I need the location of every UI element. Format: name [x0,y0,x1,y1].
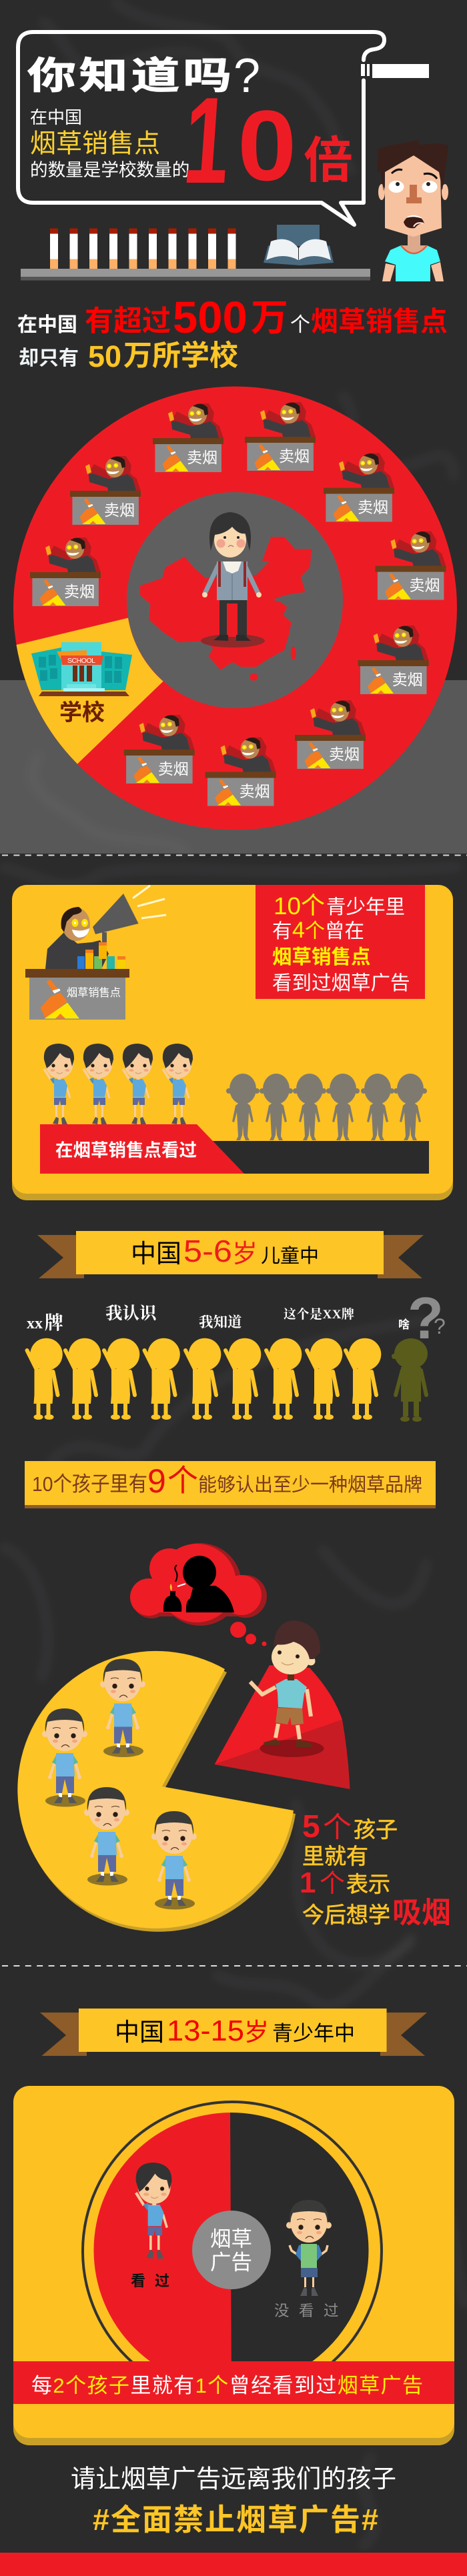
map of China [140,537,312,681]
pie slice [215,1665,342,1764]
label: not seen [274,2303,339,2319]
outlet 4: 卖烟 [410,577,440,594]
figure: 1 child who does not [392,1338,428,1422]
inner circle [127,492,343,708]
background band [0,680,467,854]
number: 500: 500 [173,293,248,343]
figure: boy who saw [136,2163,171,2259]
text: number compared to schools: 的数量是学校数量的 [30,160,189,180]
figure: boy who did not see [286,2200,332,2296]
text: times: 倍 [304,133,353,188]
outlet 7: 卖烟 [240,783,270,800]
text: tobacco outlets: 烟草销售点 [30,129,160,159]
panel: top speech bubble [18,32,429,225]
label: not seen: 过 [324,2303,339,2319]
text: but only: 却只有 [19,347,79,369]
question mark: ? [234,49,260,103]
panel: half of teens saw ads [13,2086,454,2445]
text: tobacco advertising: 烟草 [210,2227,252,2251]
figures: 6 teens grey [226,1074,427,1140]
text: seen at outlets: 在烟草销售点看过 [55,1140,197,1160]
heading: did you know: 你知道吗 [27,55,235,97]
text block: 1 in 5 wants to smoke: 表示 [346,1872,390,1896]
labels: children's speech: 牌 [45,1312,63,1334]
outlet 1 [153,403,223,472]
heading ribbon: ages 5-6 [37,1231,424,1278]
bar: red seen at outlet [40,1124,244,1174]
heading ribbon: ages 13-15: 岁 [244,2019,269,2046]
text: in China: 在中国 [17,314,77,336]
outlet 6 [295,700,366,769]
figures: 9 children recognise brands [27,1338,381,1420]
outlet 2 [245,402,316,471]
label: not seen: 没 [274,2303,290,2319]
label: seen: 过 [155,2273,169,2289]
pie remainder [19,1654,296,1932]
heading ribbon: ages 5-6: 儿童中 [261,1245,319,1267]
big number ten: 0 [238,89,296,201]
callout: 9 in 10 children: 个 [167,1463,198,1498]
text: measure word: 个 [290,314,310,336]
text: tobacco advertising [210,2227,252,2274]
figure: sad child B [42,1708,87,1807]
callout: 4 in 10 teens: 4 [292,918,305,943]
callout: 4 in 10 teens [256,885,425,999]
outlet 2: 卖烟 [279,447,310,465]
text block: 1 in 5 wants to smoke [300,1809,451,1929]
callout: 9 in 10 children: 10个孩子里有 [32,1472,147,1496]
text: more than: 有超过 [85,305,171,337]
text block: 1 in 5 wants to smoke: 今后想学 [302,1902,390,1927]
text block: 1 in 5 wants to smoke: 吸烟 [392,1896,451,1929]
school wedge [16,618,163,764]
callout: 4 in 10 teens: 曾在 [325,920,364,942]
text: outlet sign: 烟草销售点 [67,987,121,999]
label: seen [131,2273,169,2289]
outlet 3: 卖烟 [358,499,388,516]
text: school sign: SCHOOL [67,657,95,665]
outlet 7 [205,738,276,806]
text: tobacco advertising: 广告 [210,2250,252,2274]
figure: smiling boy [250,1620,324,1757]
heading ribbon: ages 5-6: 中国 [131,1240,181,1268]
text: ten thousand: 万 [251,297,288,339]
icon: cigarette in bubble [361,64,429,78]
text block: 1 in 5 wants to smoke: 个 [320,1870,345,1898]
callout: 9 in 10 children: 9 [147,1462,166,1500]
heading ribbon: ages 13-15 [40,2009,427,2056]
labels: children's speech: 我知道 [199,1314,242,1330]
labels: children's speech: 这个是XX牌 [284,1307,354,1322]
text: campaign hashtag: #全面禁止烟草广告# [93,2503,378,2537]
outlet 5: 卖烟 [392,671,423,688]
panel: point of sale advertising [12,885,453,1200]
heading ribbon: ages 13-15: 青少年中 [272,2022,355,2045]
text: keep ads away from children: 请让烟草广告远离我们的孩子 [71,2465,396,2493]
heading ribbon: ages 5-6: 5-6 [183,1234,232,1268]
outlet 9 [30,537,101,606]
outlet 9: 卖烟 [64,583,95,600]
heading ribbon: ages 13-15: 13-15 [167,2015,244,2047]
divider [2,855,467,856]
figure: sad child D [151,1811,197,1910]
text block: 1 in 5 wants to smoke: 5 [302,1809,320,1844]
bar: dark remainder [200,1141,429,1174]
callout: 4 in 10 teens: 个 [305,920,325,942]
callout: 4 in 10 teens: 青少年里 [326,896,405,918]
outlet 1: 卖烟 [187,449,217,466]
outlet 3 [324,453,394,521]
callout: 9 in 10 children [25,1461,436,1508]
outlet 5 [358,625,429,694]
big number ten: 1 [179,73,234,209]
labels: children's speech: xx [27,1315,43,1332]
text: one in two teens: 每2个孩子里就有1个曾经看到过烟草广告 [31,2374,423,2397]
outlet 4 [375,531,446,600]
divider [2,1965,467,1967]
chart: circle of outlets versus one school [13,387,457,830]
labels: children's speech: 啥 [398,1318,410,1331]
heading ribbon: ages 5-6: 岁 [232,1240,258,1268]
outlet 10 [70,456,141,525]
text block: 1 in 5 wants to smoke: 里就有 [302,1844,368,1868]
chart: pie of one in five [17,1620,350,1932]
callout: 9 in 10 children: 能够认出至少一种烟草品牌 [198,1474,422,1496]
character: sad student [201,512,265,648]
text block: 1 in 5 wants to smoke: 个 [323,1812,352,1844]
callout: 4 in 10 teens: 有 [272,920,292,942]
text: in China: 在中国 [30,107,82,127]
text: schools: 万所学校 [123,340,238,372]
label: not seen: 看 [299,2303,314,2319]
icon: question marks: ? [408,1285,444,1351]
icon: school building [31,642,132,696]
text block: 1 in 5 wants to smoke: 1 [300,1866,316,1899]
number: 50: 50 [88,339,121,373]
text: school label: 学校 [59,700,105,726]
outlet 8 [124,715,195,784]
footer bar [0,2553,467,2576]
callout: 4 in 10 teens: 烟草销售点 [272,946,371,968]
icon: thought dots [230,1622,267,1646]
center circle [192,2211,271,2289]
bubble outline [18,32,384,225]
labels: children's speech [27,1304,410,1334]
text block: 1 in 5 wants to smoke: 孩子 [354,1817,398,1842]
callout: 4 in 10 teens: 个 [301,892,325,919]
outlet 6: 卖烟 [329,746,360,763]
icon: cigarette packs [77,942,125,969]
outlet 10: 卖烟 [104,501,135,519]
outlet 8: 卖烟 [158,760,189,778]
figure: sad child C [84,1787,129,1886]
callout: 4 in 10 teens: 10 [274,892,301,920]
band: one in two [13,2361,454,2404]
heading ribbon: ages 13-15: 中国 [115,2019,164,2046]
big number ten [179,73,296,209]
chart: saw half [94,2113,231,2388]
chart: did not see half [230,2113,369,2388]
figure: sad child A [100,1659,145,1757]
chart ring [83,2102,382,2401]
text: tobacco outlets: 烟草销售点 [311,306,448,337]
icon: open book [264,225,334,265]
text block: 5 million outlets [17,293,448,373]
character: vendor with megaphone [25,886,166,1020]
icon: thought cloud with smoker [130,1543,267,1626]
panel body [12,892,453,1200]
labels: children's speech: 我认识 [105,1304,158,1323]
counter [25,969,129,978]
label: seen: 看 [131,2273,145,2289]
character: shocked man [377,140,448,281]
icon: question marks: ? [434,1314,446,1338]
icon: row of cigarettes on shelf [21,228,370,280]
callout: 4 in 10 teens: 看到过烟草广告 [272,972,410,994]
figures: 4 teens who saw ads [44,1044,193,1124]
